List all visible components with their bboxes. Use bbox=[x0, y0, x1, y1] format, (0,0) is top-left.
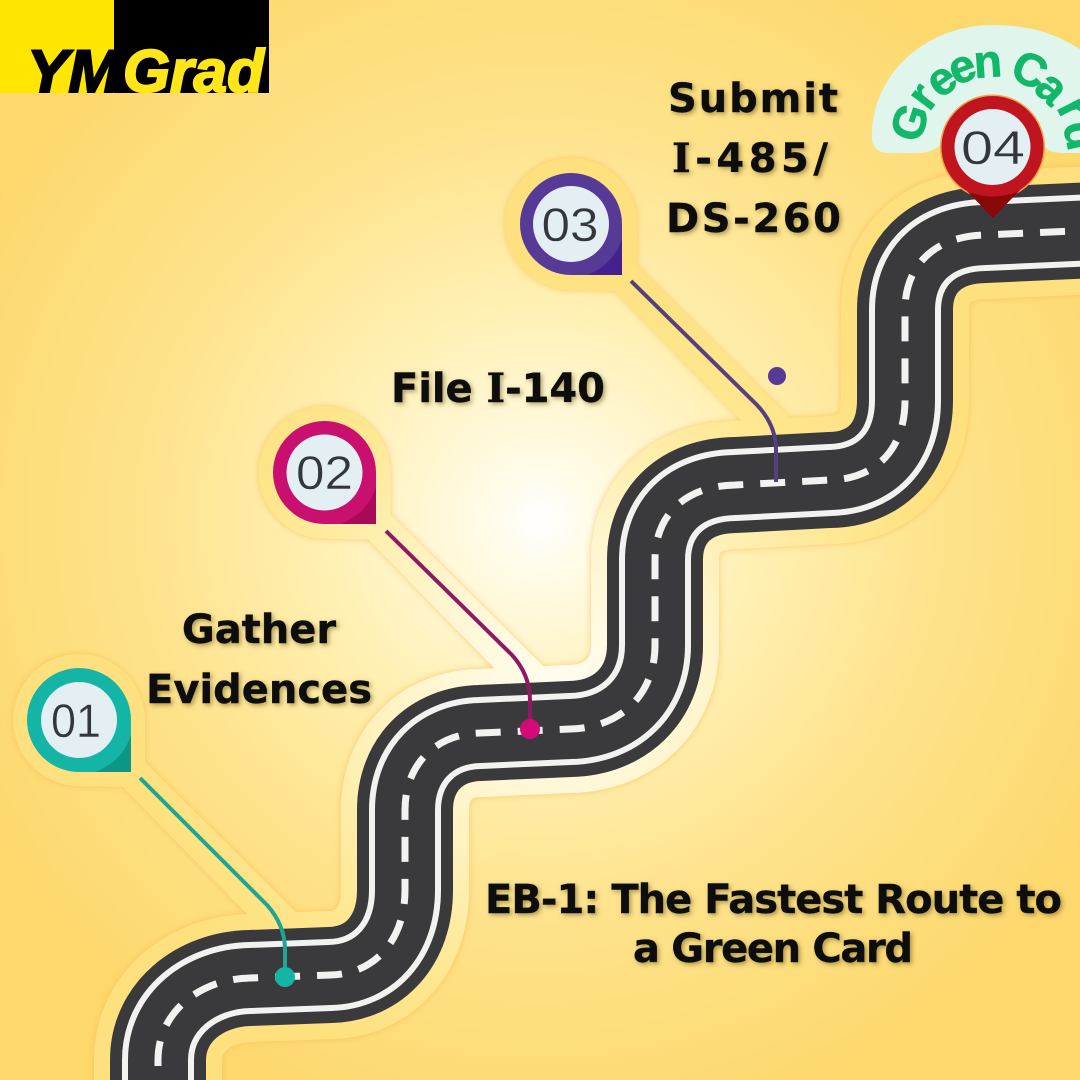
headline: a Green Card bbox=[633, 926, 913, 972]
step label: file i-140: File I-140 bbox=[391, 365, 605, 412]
logo: YM bbox=[27, 38, 122, 105]
pin 02 and connector: 02 bbox=[296, 446, 353, 499]
road bbox=[158, 230, 1080, 1080]
pin 01 and connector: 01 bbox=[51, 694, 101, 747]
step label: submit i-485 / ds-260: DS-260 bbox=[666, 196, 841, 242]
step label: gather evidences: Evidences bbox=[146, 667, 372, 713]
step label: submit i-485 / ds-260: Submit bbox=[668, 76, 838, 122]
headline bbox=[485, 877, 1062, 972]
pin 04: 04 bbox=[961, 121, 1025, 174]
pin 02 and connector bbox=[273, 421, 540, 739]
pin 03 and connector: 03 bbox=[542, 198, 598, 251]
step label: gather evidences: Gather bbox=[182, 607, 336, 653]
step label: gather evidences bbox=[146, 607, 372, 713]
step label: submit i-485 / ds-260: I-485/ bbox=[672, 135, 828, 182]
pin 01 and connector bbox=[27, 668, 295, 987]
headline: EB-1: The Fastest Route to bbox=[485, 877, 1062, 923]
logo bbox=[0, 0, 269, 105]
logo: Grad bbox=[123, 38, 265, 105]
step label: submit i-485 / ds-260 bbox=[666, 76, 841, 242]
pin 04 bbox=[940, 94, 1045, 218]
pin 03 and connector bbox=[520, 173, 786, 482]
